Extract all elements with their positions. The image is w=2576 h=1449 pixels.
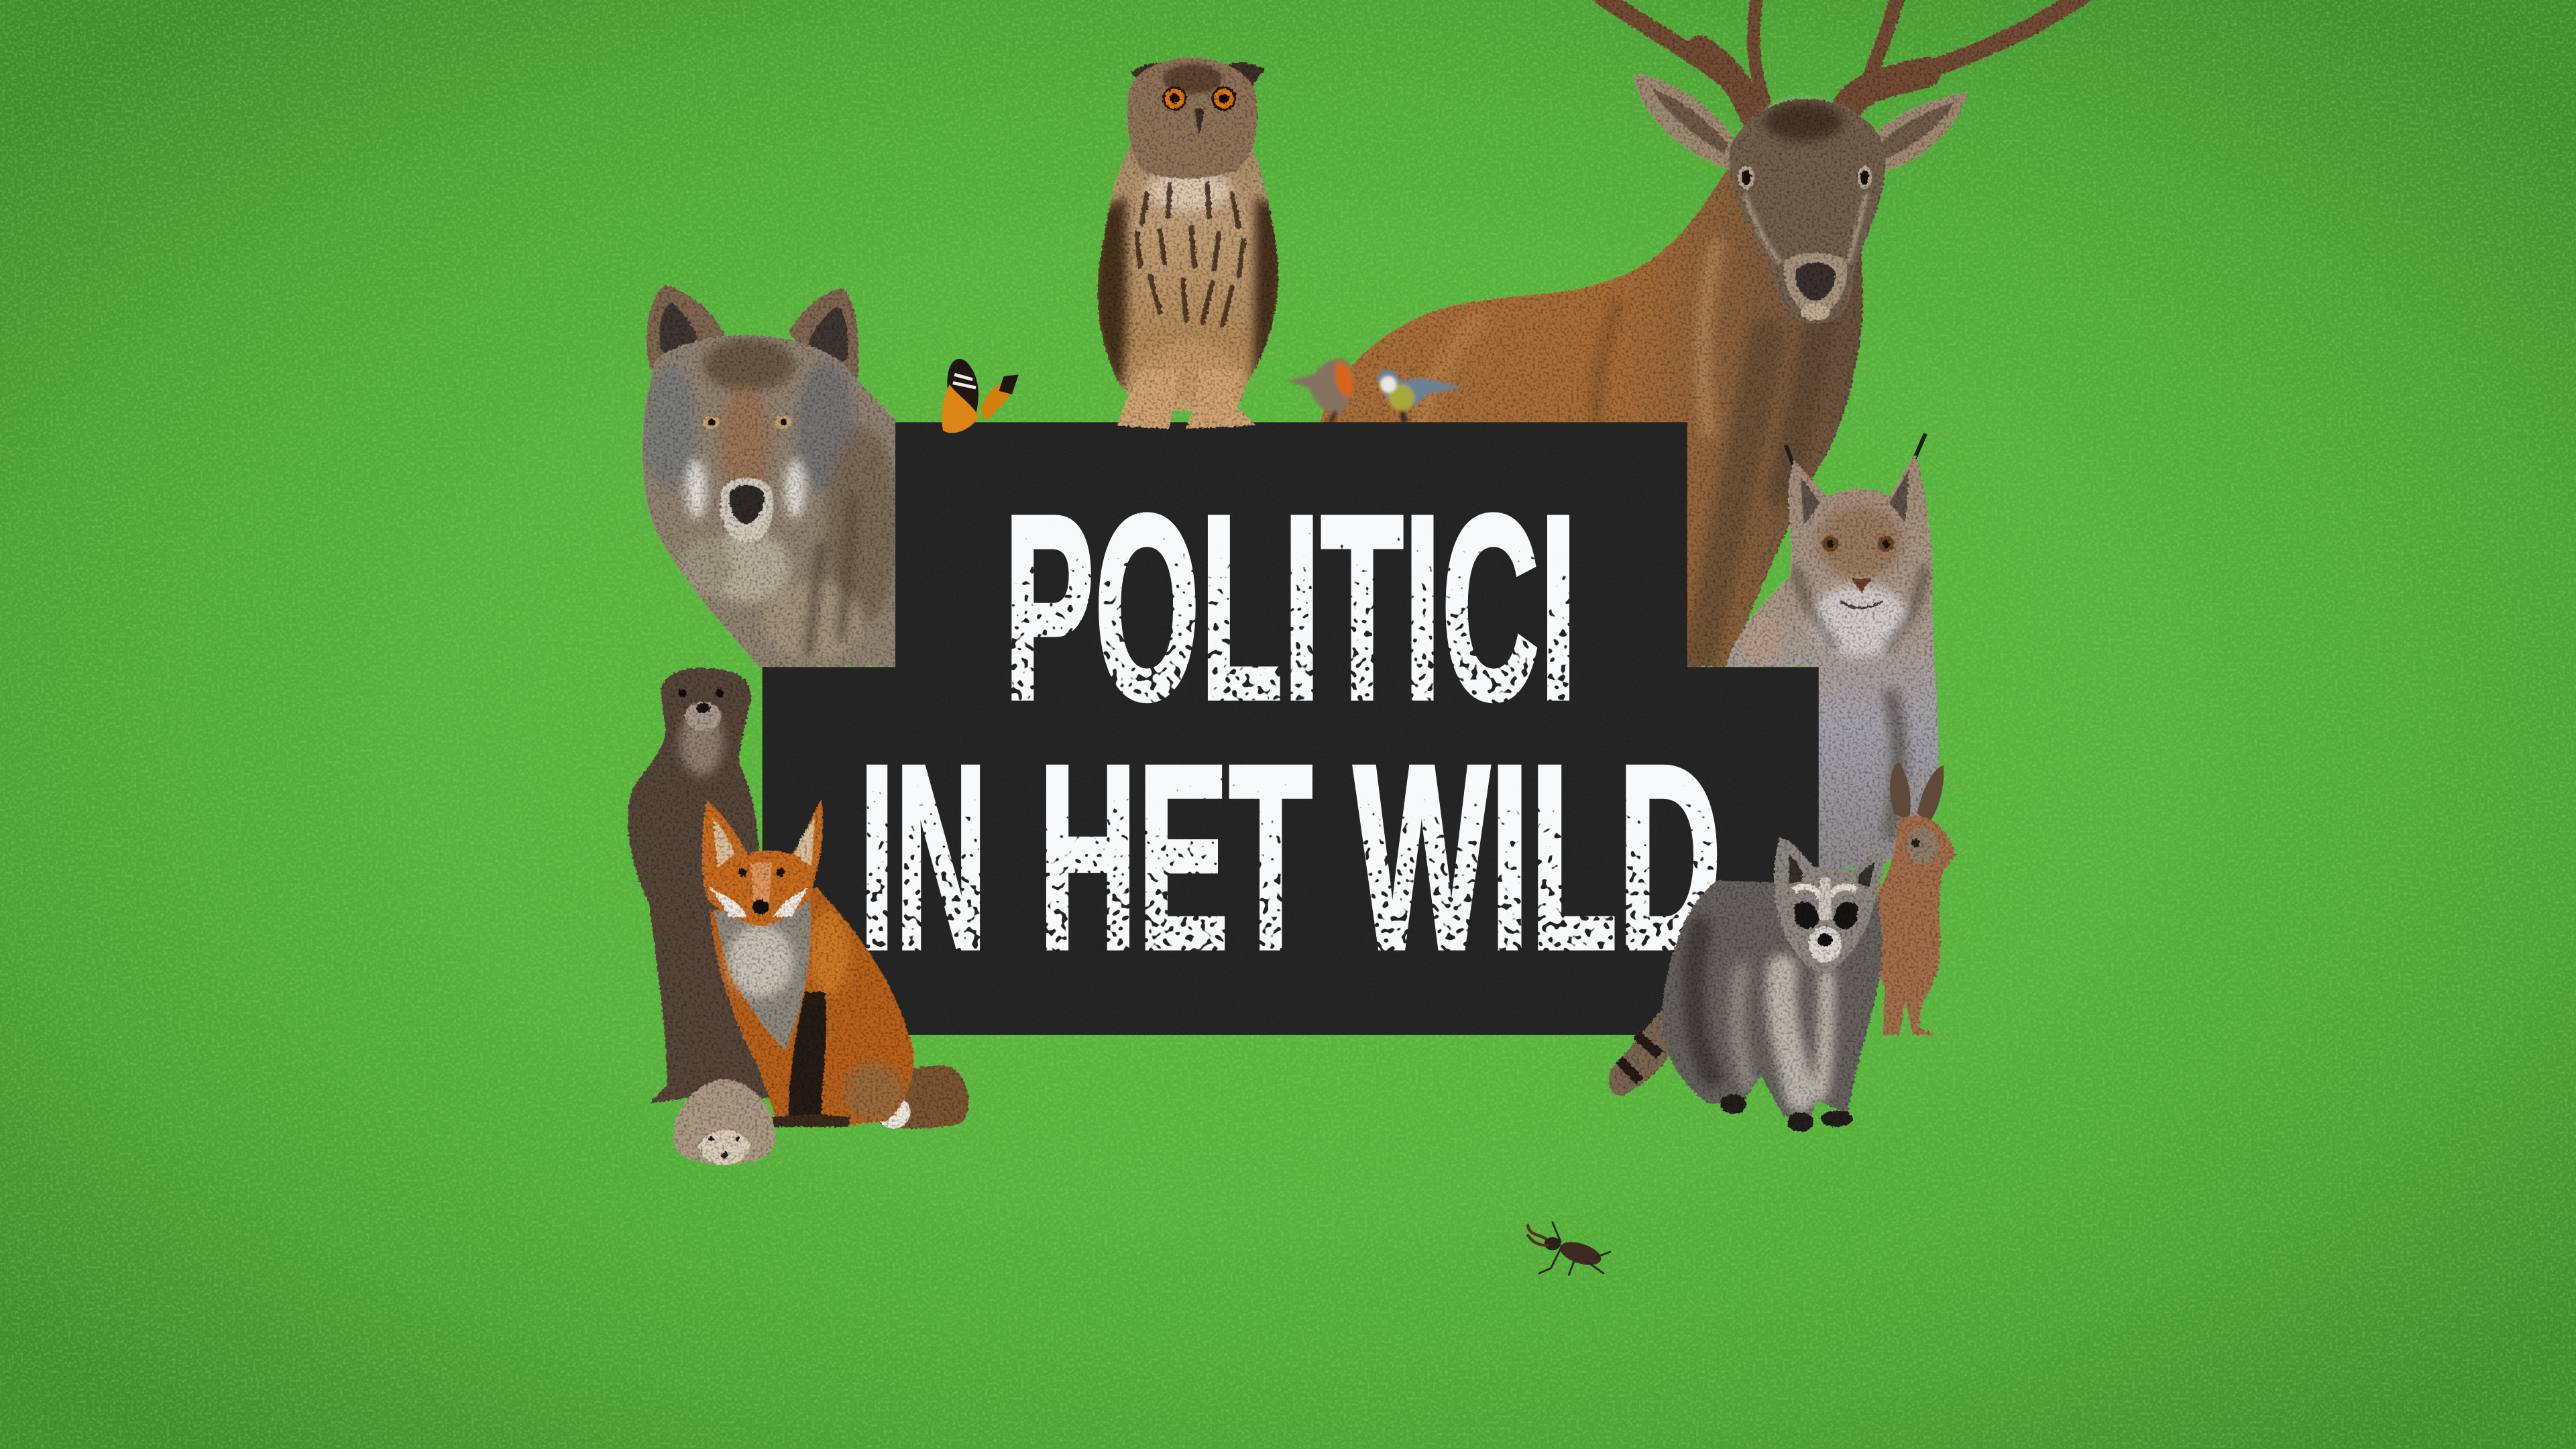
- title panel: stepped black plinth: [763, 422, 1819, 1035]
- title: IN HET WILD: [859, 710, 1722, 1004]
- animal: raccoon: [1609, 838, 1883, 1132]
- deer antlers: [1593, 0, 2090, 118]
- animal: hare: [1870, 762, 1956, 1035]
- raccoon head: [1774, 838, 1883, 974]
- owl feet on panel: [1117, 370, 1257, 429]
- title: POLITICI: POLITICI: [1004, 461, 1577, 755]
- animal: stag beetle: [1528, 1222, 1610, 1275]
- deer body and neck: [1319, 148, 1863, 667]
- hare ears: [1890, 762, 1944, 824]
- animal: butterfly: [942, 359, 1019, 433]
- animal: red fox: [702, 800, 969, 1128]
- owl body: [1097, 145, 1278, 411]
- title: IN HET WILD: HET: [1038, 710, 1312, 1004]
- hare body and head: [1870, 815, 1956, 1035]
- animal: lynx: [1727, 434, 1939, 867]
- animal: owl: [1094, 58, 1284, 411]
- deer head: [1730, 99, 1885, 323]
- title: IN HET WILD: IN: [859, 710, 987, 1004]
- animal: hedgehog: [673, 1079, 775, 1165]
- owl chest streaks: [1137, 184, 1243, 325]
- owl head: [1127, 58, 1257, 178]
- lynx body and head: [1727, 453, 1939, 867]
- fox tail: [876, 1065, 969, 1128]
- animal: robin: [1286, 359, 1353, 422]
- animal: wolf: [642, 284, 900, 667]
- deer ears: [1633, 74, 1968, 174]
- fox head: [702, 800, 823, 926]
- title: IN HET WILD: WILD: [1353, 710, 1722, 1004]
- fox body: [710, 887, 914, 1127]
- animal: otter: [628, 667, 782, 1104]
- raccoon tail: [1609, 1002, 1689, 1096]
- grunge speckles over the title: [846, 509, 1733, 956]
- wolf head and body: [642, 335, 900, 667]
- owl eyes: [1162, 87, 1187, 111]
- owl wing shading: [1094, 169, 1284, 399]
- lynx ear tufts: [1786, 434, 1925, 467]
- animal: red deer: [1319, 0, 2090, 667]
- raccoon paws: [1720, 1094, 1746, 1114]
- raccoon body: [1662, 881, 1883, 1132]
- wolf ears: [647, 284, 858, 386]
- owl ear tufts: [1130, 62, 1265, 102]
- animal: blue tit: [1377, 370, 1464, 422]
